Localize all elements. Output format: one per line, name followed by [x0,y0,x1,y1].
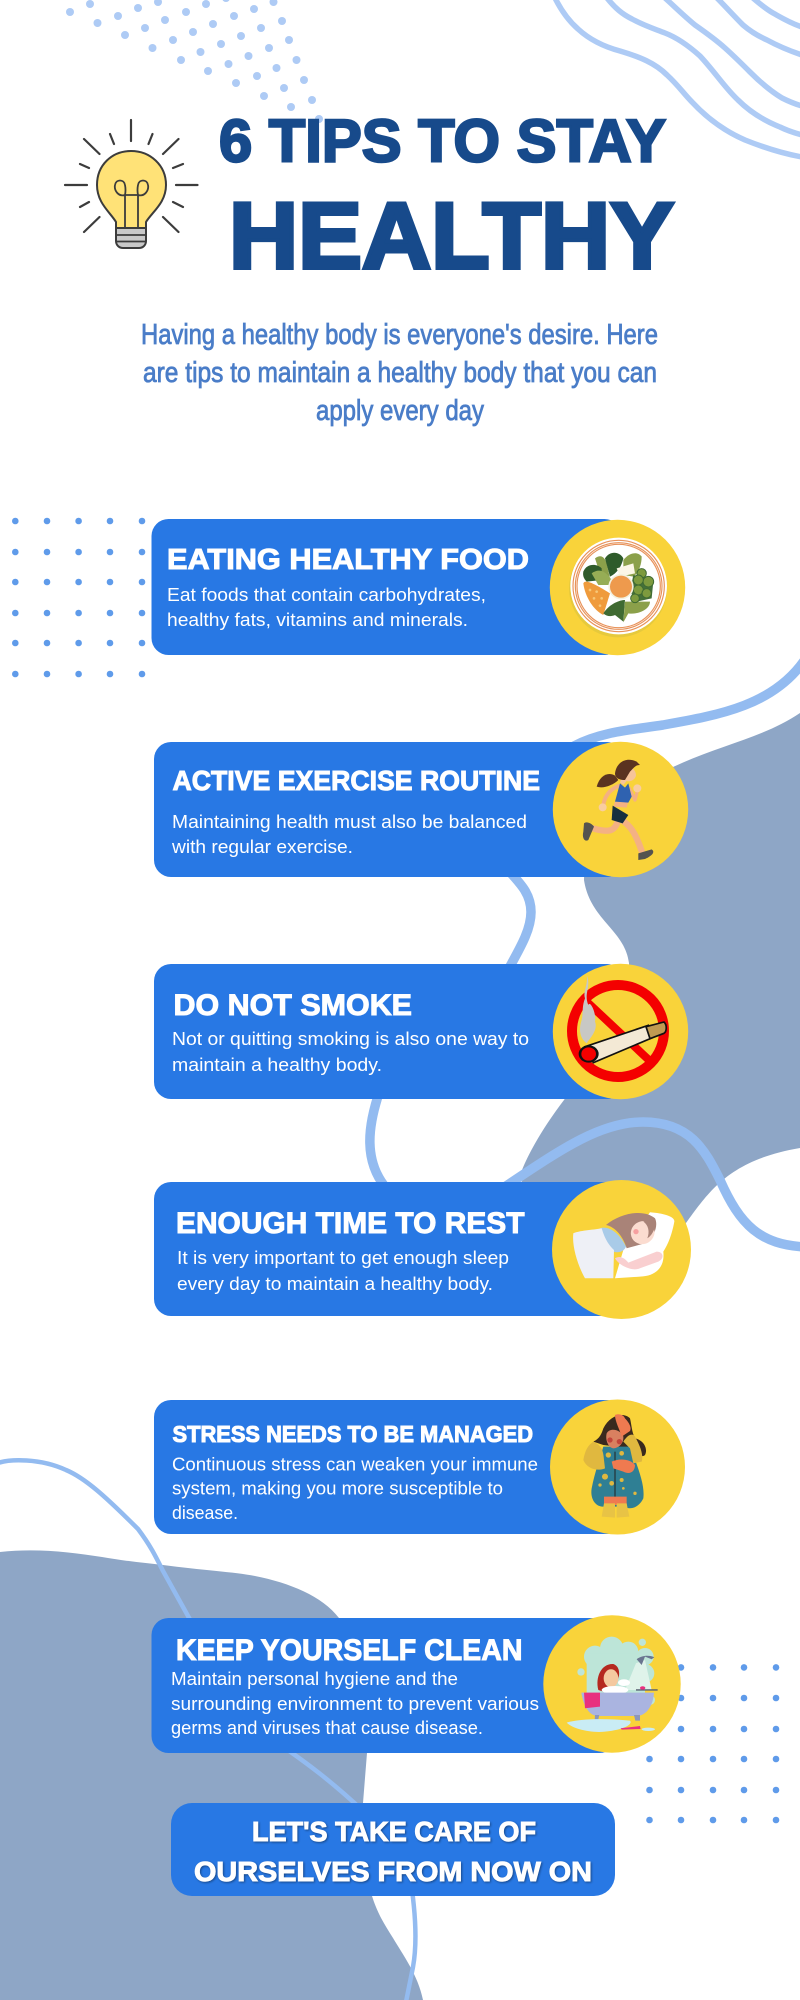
background blob: right [520,713,800,1290]
card description: every day to maintain a healthy body. [177,1273,493,1294]
button text: OURSELVES FROM NOW ON [194,1856,592,1887]
dots: top left diagonal pattern [66,0,323,123]
dots: left of first card [12,518,145,677]
card description: healthy fats, vitamins and minerals. [167,609,468,630]
panel: eating healthy food [152,519,685,655]
background blob: bottom left [0,1550,423,2000]
card heading: ACTIVE EXERCISE ROUTINE [172,765,540,796]
panel: stress needs to be managed [154,1400,685,1534]
card heading: ENOUGH TIME TO REST [176,1207,524,1240]
card description [172,1454,538,1523]
card description: with regular exercise. [171,836,353,857]
panel: keep yourself clean [152,1615,681,1753]
card description: Not or quitting smoking is also one way to [172,1028,529,1049]
title: 6 tips to stay healthy: 6 TIPS TO STAY [219,108,666,174]
icon: woman running [583,760,653,860]
card heading: EATING HEALTHY FOOD [167,544,529,576]
panel: active exercise routine [154,742,688,877]
intro text: apply every day [316,395,484,427]
panel: enough time to rest [154,1180,691,1319]
card background [154,964,624,1099]
card description [172,1028,529,1075]
card description: surrounding environment to prevent various [171,1693,539,1714]
card heading: KEEP YOURSELF CLEAN [176,1634,522,1667]
card description [167,584,486,630]
card description: Maintaining health must also be balanced [172,811,527,832]
card description: Continuous stress can weaken your immune [172,1454,538,1474]
button text: LET'S TAKE CARE OF [252,1816,536,1847]
card description [171,811,527,857]
card description [177,1247,509,1294]
card description: Eat foods that contain carbohydrates, [167,584,486,605]
button background [171,1803,615,1896]
card heading: DO NOT SMOKE [174,989,412,1022]
button text [194,1816,592,1887]
card description: germs and viruses that cause disease. [171,1717,483,1738]
card description: system, making you more susceptible to [172,1478,503,1498]
card description [171,1668,539,1738]
card description: disease. [172,1502,238,1523]
panel: do not smoke [154,964,688,1099]
icon circle [543,1615,681,1753]
title: 6 tips to stay healthy [219,108,674,288]
icon: woman in bathtub [567,1637,658,1732]
intro text: are tips to maintain a healthy body that you can [143,357,657,389]
intro text: Having a healthy body is everyone's desire. Here [141,319,658,351]
card background [154,742,624,877]
card background [152,519,622,655]
panel: closing call to action [171,1803,615,1896]
icon: woman sleeping [573,1212,674,1278]
intro text [141,319,658,427]
icon circle [553,964,688,1099]
card background [154,1182,624,1316]
icon circle [550,1400,685,1534]
background curve: right wave [370,658,800,1247]
card background [152,1618,616,1753]
icon circle [553,742,688,877]
icon circle [552,1180,691,1319]
dots: bottom right [646,1664,779,1823]
card description: Maintain personal hygiene and the [171,1668,458,1689]
card background [154,1400,624,1534]
icon: stressed woman [583,1414,646,1518]
card description: It is very important to get enough sleep [177,1247,509,1268]
card description: maintain a healthy body. [172,1054,382,1075]
card heading: STRESS NEEDS TO BE MANAGED [172,1421,533,1447]
background waves: top right [555,0,800,157]
background curve: bottom left thin [0,1460,416,2000]
icon: light bulb [65,120,198,248]
title: 6 tips to stay healthy: HEALTHY [229,183,674,288]
icon circle [550,520,685,655]
icon: no smoking sign [572,975,666,1077]
icon: salad plate [569,538,667,637]
